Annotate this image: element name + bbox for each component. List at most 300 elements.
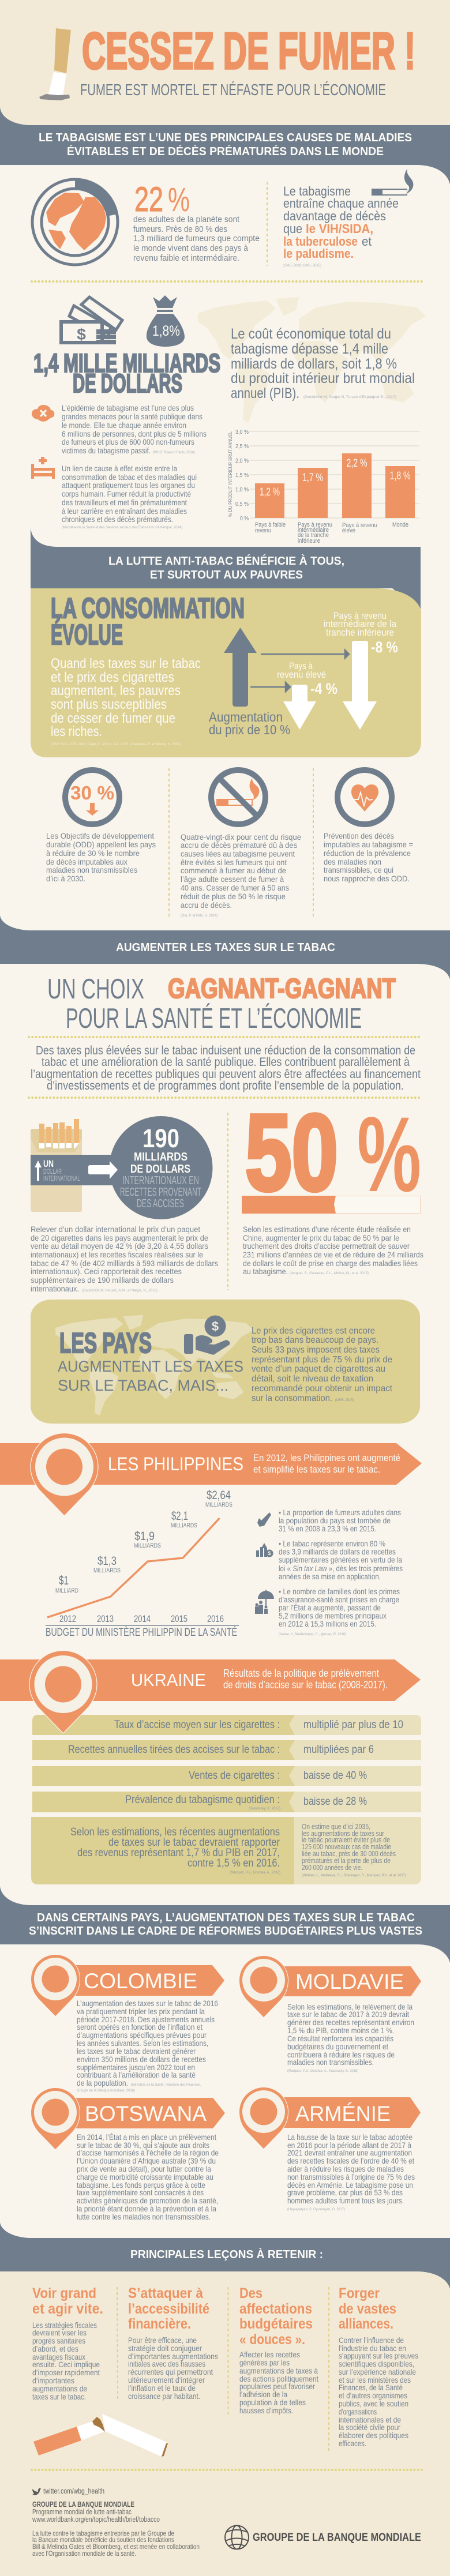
icon: globe with 22 percent ring	[32, 178, 118, 265]
heading: win-win	[47, 974, 396, 1034]
text: tobacco deaths: Le tabagisme	[283, 184, 351, 198]
country: Botswana: la priorité étant donnée à la prévention et à la	[77, 2204, 216, 2213]
panel: countries raise taxes	[31, 1300, 420, 1424]
bar chart: cost by income group: % DU PRODUIT INTÉRIEUR BRUT ANNUEL	[228, 431, 233, 517]
label: 190 billion: 190	[142, 1124, 179, 1153]
rows: indicators: multipliées par 6	[303, 1744, 374, 1756]
lesson: think big: Les stratégies fiscales	[32, 2320, 97, 2330]
bar chart: cost by income group	[228, 429, 419, 545]
lesson: think big: ensuite. Ceci implique	[32, 2360, 100, 2369]
text: tobacco revenue	[279, 1539, 403, 1581]
country: Colombie: d’augmentations spécifiques prévues pour	[77, 2030, 207, 2040]
text: China study: 231 millions d’années de vie et de réduire de 24 milliards	[243, 1250, 423, 1259]
text: economic cost	[231, 326, 415, 401]
icon: banknotes and coins: $	[77, 325, 86, 343]
country: Moldavie: taxe sur le tabac de 2017 à 2019 devrait	[287, 2010, 409, 2019]
stat: 50 percent	[242, 1092, 421, 1214]
text: tobacco revenue: supplémentaires générées en vertu de la	[279, 1555, 402, 1564]
bar chart: cost by income group: inférieure	[298, 538, 320, 545]
text: insurance: 5,2 millions de membres principaux	[279, 1611, 387, 1620]
arrow: white block	[88, 1161, 118, 1179]
text: tobacco deaths: le paludisme.	[283, 246, 354, 261]
bar chart: cost by income group: 0,5 %	[235, 501, 249, 508]
lesson: alliances: la société civile pour	[339, 2423, 400, 2432]
lesson: think big: et agir vite.	[32, 2301, 103, 2317]
text: smokers proportion	[279, 1508, 401, 1533]
lesson: soft earmarks: Des	[239, 2285, 262, 2301]
line chart: health ministry budget	[46, 1489, 239, 1639]
text: SDG target: d’ici à 2030.	[46, 874, 85, 883]
text: prices too low: vente d’un paquet de cigarettes au	[252, 1364, 385, 1374]
label: price increase: Augmentation	[209, 709, 283, 724]
country: Moldavie: Ce résultat renforcera les capacités	[287, 2034, 393, 2043]
text: quit early: 40 ans. Cesser de fumer à 50 ans	[181, 883, 289, 892]
country: Moldavie: budgétaires du gouvernement et	[287, 2042, 388, 2051]
country: Armenie: aider à réduire les risques de maladies	[287, 2164, 404, 2173]
country: Moldavie	[239, 1955, 421, 2073]
banner: Philippines: En 2012, les Philippines ont augmenté	[253, 1452, 400, 1463]
text: prices too low: Seuls 33 pays imposent des taxes	[252, 1345, 380, 1355]
line chart: health ministry budget: 2014	[134, 1613, 151, 1624]
bar chart: cost by income group: Pays à faible	[255, 521, 286, 528]
country: Moldavie: générer des recettes représentant environ	[287, 2018, 414, 2027]
stat: 22 percent: le monde vivent dans des pays à	[133, 244, 249, 253]
icon: hospital bed	[31, 457, 55, 479]
lesson: alliances	[339, 2285, 418, 2448]
lesson: affordability: récurrentes qui permettront	[128, 2367, 213, 2376]
lesson: soft earmarks: populaires peut favoriser	[239, 2382, 315, 2391]
footer contacts	[32, 2487, 200, 2558]
text: intro tax paragraph	[31, 1044, 421, 1092]
lesson: affordability: financière.	[128, 2316, 191, 2332]
text: prices too low	[252, 1326, 393, 1403]
text: one dollar explanation: internationaux.	[31, 1284, 79, 1293]
rows: indicators: baisse de 28 %	[303, 1796, 367, 1808]
bar chart: cost by income group: Pays à revenu	[298, 521, 332, 528]
text: epidemic: (WHO Tobacco Facts, 2016)	[153, 450, 195, 455]
country: Armenie	[239, 2087, 421, 2211]
lesson: affordability	[128, 2285, 218, 2401]
text: China study: Selon les estimations d’une récente étude réalisée en	[243, 1225, 411, 1234]
text: quit early: commencé à fumer au début de	[181, 866, 286, 875]
country: Armenie: hommes adultes fument tous les jours.	[287, 2196, 404, 2205]
lesson: affordability: d’importantes augmentations	[128, 2352, 218, 2361]
rows: indicators: (Krasovsky, K. 2017)	[249, 1807, 280, 1811]
text: prices too low: recommandé pour obtenir un impact	[252, 1384, 393, 1394]
text: poor quit more: les riches.	[51, 724, 102, 739]
rows: indicators	[68, 1719, 403, 1811]
heading: les pays: LES PAYS	[59, 1328, 152, 1359]
text: one dollar explanation: de 20 cigarettes dans les pays augmenterait le prix de	[31, 1233, 208, 1242]
text: health link: des travailleurs et met fin prématurément	[62, 498, 187, 507]
line chart: health ministry budget: MILLIARDS	[171, 1522, 197, 1529]
lesson: alliances: et sur les ministères des	[339, 2375, 411, 2385]
icon: up arrow	[35, 1161, 42, 1181]
icon: family under umbrella	[255, 1590, 274, 1614]
table: Ukraine results	[31, 1715, 421, 1884]
text: epidemic: L’épidémie de tabagisme est l’une des plus	[62, 403, 194, 412]
labels: arrows: intermédiaire de la	[324, 618, 396, 629]
text: tobacco revenue: • Le tabac représente environ 80 %	[279, 1539, 385, 1548]
text: prices too low: trop bas dans beaucoup de pays.	[252, 1335, 378, 1345]
band: section 5 heading	[0, 2222, 450, 2289]
banner: Ukraine: de droits d’accise sur le tabac (2008-2017).	[223, 1679, 388, 1691]
band: section 2 heading	[31, 528, 421, 611]
lesson: soft earmarks: l’adhésion de la	[239, 2390, 287, 2399]
text: poor quit more: augmentent, les pauvres	[51, 683, 181, 699]
text: health link: corps humain. Fumer réduit la productivité	[62, 489, 191, 498]
country: Botswana	[31, 2088, 225, 2227]
text: tobacco deaths	[283, 184, 399, 268]
lesson: soft earmarks: population à de telles	[239, 2398, 306, 2407]
text: SDG target: de décès imputables aux	[46, 857, 127, 866]
banner: Ukraine: Résultats de la politique de prélèvement	[223, 1668, 379, 1679]
text: SDG target: Les Objectifs de développement	[46, 831, 154, 840]
text: health link: (Ministère de la Santé et des Services sociaux des États-Unis d’Amérique, 2014)	[62, 524, 182, 530]
label: 190 billion: DES ACCISES	[137, 1197, 184, 1210]
stat: 22 percent: 22	[134, 180, 163, 219]
world map	[55, 1315, 254, 1415]
text: SDG target	[46, 831, 156, 883]
graphic: cigarette pack to 190 billion	[31, 1116, 212, 1219]
country: Botswana: l’Union douanière d’Afrique australe (39 % du	[77, 2156, 216, 2165]
icon: hand and coin	[184, 1315, 230, 1355]
text: prevention: imputables au tabagisme =	[324, 840, 413, 849]
lesson: alliances: Forger	[339, 2285, 380, 2301]
band: section 1 heading: ÉVITABLES ET DE DÉCÈS PRÉMATURÉS DANS LE MONDE	[67, 145, 384, 158]
text: economic cost: Le coût économique total du	[231, 326, 391, 342]
lesson: soft earmarks: hausses d’impôts.	[239, 2406, 293, 2415]
lesson: affordability: stratégie doit conjuguer	[128, 2344, 202, 2353]
icon: 30 percent circle: 30 %	[70, 782, 114, 803]
icon: money bag	[147, 295, 185, 347]
label: one international dollar: INTERNATIONAL	[43, 1174, 80, 1182]
icon: cigarette pack	[31, 1119, 82, 1212]
text: quit early: réduit de plus de 50 % le risque	[181, 892, 286, 901]
bar chart: cost by income group: 2,0 %	[235, 458, 249, 464]
label: one international dollar: UN	[43, 1158, 54, 1169]
country: Colombie: environ 350 millions de dollars de recettes	[77, 2055, 206, 2064]
text: quit early: l’âge adulte cessent de fumer à	[181, 874, 284, 884]
arrow: price up	[224, 628, 257, 707]
lesson: affordability: ultérieurement d’intégrer	[128, 2375, 205, 2385]
country: Moldavie: Selon les estimations, le relèvement de la	[287, 2002, 412, 2011]
label: price increase	[209, 709, 290, 737]
rows: indicators: Taux d’accise moyen sur les cigarettes :	[114, 1719, 280, 1731]
text: prices too low: Le prix des cigarettes est encore	[252, 1326, 375, 1336]
band: section 1 heading: LE TABAGISME EST L’UNE DES PRINCIPALES CAUSES DE MALADIES	[39, 132, 412, 144]
country: Botswana: d’accise harmonisés à l’échelle de la région de	[77, 2148, 219, 2157]
text: prices too low: sur la consommation.	[252, 1394, 332, 1403]
icon: map pin	[31, 1433, 98, 1516]
rows: indicators: multiplié par plus de 10	[303, 1719, 403, 1731]
country: Botswana: activités génériques de promotion de la santé,	[77, 2196, 218, 2205]
text: poor quit more: sont plus susceptibles	[51, 697, 167, 712]
country: Colombie: contribuant à l’amélioration de la santé	[77, 2070, 196, 2079]
lesson: think big	[32, 2285, 103, 2401]
country: Botswana: prix de vente au détail), pour lutter contre la	[77, 2164, 211, 2173]
lesson: soft earmarks	[239, 2285, 318, 2415]
lesson: think big: Voir grand	[32, 2285, 96, 2301]
icon: map pin	[239, 2087, 288, 2149]
bar chart: cost by income group: Pays à revenu	[342, 522, 377, 529]
text: quit early: accru de décès.	[181, 900, 232, 910]
line chart: health ministry budget: $1,3	[97, 1554, 117, 1568]
country: Botswana: En 2014, l’État a mis en place un prélèvement	[77, 2132, 216, 2142]
text: 2035 estimate	[302, 1822, 406, 1877]
line chart: health ministry budget: $1	[59, 1574, 69, 1587]
text: economic cost: du produit intérieur brut mondial	[231, 370, 415, 386]
country: Colombie	[31, 1954, 224, 2093]
heading: cost	[33, 348, 220, 398]
country: Armenie: non transmissibles à l’origine de 75 % des	[287, 2172, 415, 2181]
line chart: health ministry budget: BUDGET DU MINISTÈRE PHILIPPIN DE LA SANTÉ	[46, 1627, 237, 1639]
lesson: alliances: élaborer des politiques	[339, 2431, 408, 2440]
country: Armenie: des recettes fiscales de l’ordre de 40 % et	[287, 2156, 414, 2165]
banner: Philippines: LES PHILIPPINES	[108, 1454, 243, 1474]
text: tobacco deaths: la tuberculose	[283, 234, 358, 249]
lesson: alliances: de vastes	[339, 2301, 396, 2317]
icon: rising bars and dollar: $	[268, 1550, 271, 1556]
country: Colombie: (Ministère de la Santé, ministère des Finances,	[131, 2083, 201, 2087]
rows: indicators: baisse de 40 %	[303, 1770, 367, 1782]
text: economic cost: (Goodchild M, Nargis N, Tursan d’Espaignet E., 2017)	[303, 395, 396, 399]
rows: indicators: Prévalence du tabagisme quotidien :	[125, 1794, 280, 1806]
country: Botswana: taxe supplémentaire sont consacrés à des	[77, 2188, 204, 2197]
country: Colombie: de la population.	[77, 2078, 128, 2087]
heading: win-win: GAGNANT-GAGNANT	[168, 974, 396, 1004]
stat: 50 percent: 50	[245, 1092, 338, 1213]
lesson: alliances: et d’autres organismes	[339, 2391, 407, 2400]
bar chart: cost by income group: 1,0 %	[235, 487, 249, 493]
text: tobacco deaths: et	[362, 234, 372, 249]
labels: arrows: -4 %	[310, 680, 337, 697]
lesson: alliances: publics, avec le soutien	[339, 2399, 408, 2408]
lesson: alliances: alliances.	[339, 2316, 393, 2332]
text: prices too low: (OMS, 2015)	[335, 1398, 354, 1402]
text: poor quit more: de cesser de fumer que	[51, 711, 175, 726]
bar chart: cost by income group: 2,2 %	[346, 457, 367, 470]
text: health link: attaquent pratiquement tous les organes du	[62, 480, 195, 490]
lesson: think big: d’imposer rapidement	[32, 2368, 100, 2377]
text: health link	[62, 464, 197, 530]
bar chart: cost by income group: revenu	[255, 527, 271, 534]
text: quit early: (Jha, P. et Peto, R. 2014)	[181, 914, 217, 918]
footer contacts: twitter.com/wbg_health	[43, 2487, 104, 2495]
country: Moldavie: (Marquez, P.V., Dorotea, A., Krasovsky, K. 2016)	[287, 2069, 358, 2073]
text: one dollar explanation: tabac de 47 % (de 402 milliards à 593 milliards de dollars	[31, 1259, 218, 1268]
line chart: health ministry budget: MILLIARDS	[205, 1501, 232, 1508]
text: quit early: causes liées au tabagisme peuvent	[181, 849, 295, 858]
text: tobacco deaths: entraîne chaque année	[283, 196, 399, 211]
text: one dollar explanation: (Goodchild, M. Perucic, A.M., et Nargis, N., 2016)	[82, 1289, 158, 1293]
text: GDP estimate	[70, 1826, 280, 1875]
stat: 22 percent: revenu faible et intermédiaire.	[133, 254, 239, 263]
lesson: alliances: scientifiques disponibles,	[339, 2359, 414, 2368]
heading: les pays	[58, 1328, 243, 1394]
line chart: health ministry budget: $1,9	[134, 1530, 155, 1543]
country: Moldavie: 1,5 % du PIB, contre moins de 1 %.	[287, 2026, 394, 2035]
lesson: think big: d’abord, et des	[32, 2344, 78, 2353]
band: section 4 heading: DANS CERTAINS PAYS, L’AUGMENTATION DES TAXES SUR LE TABAC	[37, 1912, 415, 1924]
text: health link: Un lien de cause à effet existe entre la	[62, 464, 177, 473]
text: GDP estimate: contre 1,5 % en 2016.	[187, 1857, 280, 1869]
band: section 4 heading: S’INSCRIT DANS LE CADRE DE RÉFORMES BUDGÉTAIRES PLUS VASTES	[29, 1924, 422, 1937]
text: insurance: en 2012 à 15,3 millions en 2015.	[279, 1619, 376, 1628]
icon: map pin	[31, 2088, 80, 2150]
text: health link: chroniques et des décès prématurés.	[62, 515, 173, 524]
banner: Philippines	[0, 1433, 422, 1516]
text: GDP estimate: (Marquez, P.V., Dorotea, A., 2016)	[230, 1871, 280, 1875]
line chart: health ministry budget: $2,1	[171, 1509, 188, 1523]
text: prevention	[324, 831, 413, 883]
text: quit early	[181, 832, 301, 918]
bar chart: cost by income group: Monde	[392, 521, 408, 528]
text: one dollar explanation: Relever d’un dollar international le prix d’un paquet	[31, 1225, 200, 1234]
bar chart: cost by income group: 2,5 %	[235, 444, 249, 450]
heading: win-win: UN CHOIX	[47, 974, 144, 1005]
band: section 2 heading: LA LUTTE ANTI-TABAC BÉNÉFICIE À TOUS,	[108, 554, 344, 568]
text: tobacco revenue: années de sa mise en application.	[279, 1572, 381, 1581]
text: insurance: par l’État a augmenté, passant de	[279, 1603, 381, 1612]
text: poor quit more: et le prix des cigarettes	[51, 670, 174, 685]
text: China study	[243, 1225, 423, 1276]
text: insurance	[279, 1587, 400, 1636]
text: SDG target: à réduire de 30 % le nombre	[46, 848, 140, 858]
rows: indicators: Ventes de cigarettes :	[189, 1770, 280, 1782]
text: prevention: réduction de la prévalence	[324, 848, 411, 858]
text: insurance: (Kaiser, K, Bredenkamp, C., Iglesias, R. 2016)	[279, 1632, 346, 1636]
text: epidemic: victimes du tabagisme passif.	[62, 446, 151, 455]
text: insurance: d’assurance-santé sont prises en charge	[279, 1595, 399, 1604]
line chart: health ministry budget: 2015	[171, 1613, 187, 1624]
footer contacts: la Banque mondiale bénéficie du soutien des fondations	[32, 2536, 174, 2544]
country: Colombie: les taxes sur le tabac devraient générer	[77, 2046, 196, 2056]
icon: twitter bird	[32, 2488, 41, 2495]
icon: no smoking	[211, 770, 265, 824]
lesson: soft earmarks: augmentations de taxes à	[239, 2366, 318, 2375]
bar chart: cost by income group: 3,0 %	[235, 429, 249, 435]
country: Colombie: Groupe de la Banque mondiale, 2016)	[77, 2089, 135, 2093]
icon: 30 percent circle	[65, 770, 119, 824]
lesson: alliances: Contrer l’influence de	[339, 2335, 404, 2345]
panel: consumption evolves	[31, 588, 421, 757]
banner: Ukraine: UKRAINE	[131, 1670, 206, 1690]
country: Botswana: sur le tabac de 30 %, qui s’ajoute aux droits	[77, 2141, 209, 2150]
band: section 3 heading: AUGMENTER LES TAXES SUR LE TABAC	[116, 941, 335, 954]
stat: 22 percent	[133, 180, 260, 263]
text: poor quit more: Quand les taxes sur le tabac	[51, 656, 201, 671]
line chart: health ministry budget: MILLIARDS	[134, 1542, 161, 1549]
country: Colombie: supplémentaires jusqu’en 2022 tout en	[77, 2063, 195, 2072]
lesson: affordability: S’attaquer à	[128, 2285, 203, 2301]
arrow: minus 8 percent	[343, 641, 377, 730]
text: one dollar explanation	[31, 1225, 218, 1293]
lesson: alliances: efficaces.	[339, 2439, 366, 2448]
country: Colombie: L’augmentation des taxes sur le tabac de 2016	[77, 1999, 218, 2008]
line chart: health ministry budget: MILLIARD	[55, 1587, 78, 1594]
heading: les pays: AUGMENTENT LES TAXES	[58, 1358, 243, 1375]
text: China study: truchement des droits d’accise permettrait de sauver	[243, 1241, 410, 1251]
text: tobacco revenue: loi « Sin tax Law », dès les trois premières	[279, 1564, 403, 1573]
text: prevention: transmissibles, ce qui	[324, 865, 393, 874]
country: Moldavie: MOLDAVIE	[295, 1970, 404, 1993]
country: Colombie: les années suivantes. Selon les estimations,	[77, 2038, 208, 2048]
text: 2035 estimate: les augmentations de taxes sur	[302, 1829, 385, 1838]
text: tobacco deaths: que	[283, 221, 302, 236]
text: smokers proportion: la population du pays est tombée de	[279, 1516, 391, 1525]
icon: lit cigarette	[372, 168, 413, 196]
text: China study: au tabagisme.	[243, 1267, 288, 1276]
lesson: alliances: internationales et de	[339, 2415, 401, 2424]
arrow: to lower middle income	[261, 650, 349, 658]
text: China study: (Verguet, S., Gauvreau, C.L., Mishra, M., et al. 2015)	[290, 1271, 369, 1275]
band: section 2 heading: ET SURTOUT AUX PAUVRES	[150, 569, 303, 581]
text: intro tax paragraph: d’investissements et de programmes dont profite l’ensemble de la population.	[47, 1079, 404, 1092]
bar chart: cost by income group: 1,2 %	[260, 486, 280, 498]
arrow: minus 4 percent	[283, 685, 316, 730]
heading: les pays: SUR LE TABAC, MAIS...	[58, 1377, 228, 1394]
line chart: health ministry budget: 2012	[59, 1613, 76, 1624]
list: Philippines results	[255, 1508, 403, 1636]
lesson: think big: taxes sur le tabac.	[32, 2392, 86, 2401]
country: Colombie: COLOMBIE	[84, 1969, 197, 1993]
stat: 22 percent: 1,3 milliard de fumeurs que compte	[133, 234, 260, 243]
bar chart: cost by income group: de la tranche	[298, 532, 329, 539]
band: section 3 heading	[0, 915, 450, 979]
banner: Philippines: et simplifié les taxes sur le tabac.	[253, 1464, 380, 1475]
text: epidemic: grandes menaces pour la santé publique dans	[62, 412, 202, 421]
icon: map pin	[29, 1651, 97, 1733]
text: poor quit more: (CBO 2012, IARC 2011, Gallet, C. et List, J.A., 2003, Chaloupka, F. et Warner, K. 2000)	[51, 742, 181, 746]
line chart: health ministry budget: $2,64	[207, 1489, 231, 1502]
lesson: affordability: initiales avec des hausses	[128, 2359, 205, 2368]
text: China study: de dollars le coût de prise en charge des maladies liées	[243, 1259, 418, 1268]
lesson: soft earmarks: budgétaires	[239, 2316, 313, 2332]
icon: rising bars and dollar	[256, 1543, 273, 1557]
text: prices too low: représentant plus de 75 % du prix de	[252, 1355, 392, 1365]
country: Botswana: BOTSWANA	[85, 2102, 207, 2126]
label: one international dollar	[43, 1158, 80, 1182]
stat: 22 percent: fumeurs. Près de 80 % des	[133, 225, 227, 234]
country: Armenie: en 2016 pour la période allant de 2017 à	[287, 2141, 411, 2150]
footer contacts: www.worldbank.org/en/topic/health/brief/tobacco	[32, 2515, 160, 2524]
text: economic cost: annuel (PIB).	[231, 385, 299, 401]
label: price increase: du prix de 10 %	[209, 722, 290, 737]
text: one dollar explanation: vente au détail moyen de 42 % (de 3,20 à 4,55 dollars	[31, 1241, 208, 1251]
footer contacts: GROUPE DE LA BANQUE MONDIALE	[32, 2500, 134, 2509]
country: Armenie: (Hayrapetyan, S. Gyulumyan, O. 2017)	[287, 2207, 345, 2211]
line chart: health ministry budget: 2013	[97, 1613, 114, 1624]
icon: map pin	[31, 1954, 80, 2017]
label: 190 billion	[120, 1124, 201, 1210]
country: Armenie: grave problème, car plus de 53 % des	[287, 2188, 403, 2197]
label: 190 billion: DE DOLLARS	[130, 1163, 190, 1176]
lesson: affordability: Pour être efficace, une	[128, 2335, 197, 2345]
country: Moldavie: maladies non transmissibles.	[287, 2057, 374, 2067]
bar chart: cost by income group: 1,8 %	[390, 470, 411, 482]
country: Moldavie: contribuera à réduire les risques de	[287, 2050, 395, 2059]
icon: money bag: 1,8%	[152, 323, 180, 339]
band: section 4 heading	[0, 1886, 450, 1963]
lesson: think big: devraient viser les	[32, 2328, 87, 2337]
labels: arrows: revenu élevé	[277, 669, 326, 680]
lesson: think big: progrès sanitaires	[32, 2336, 85, 2345]
text: smokers proportion: • La proportion de fumeurs adultes dans	[279, 1508, 401, 1517]
text: epidemic: de fumeurs et plus de 600 000 non-fumeurs	[62, 437, 194, 446]
bar chart: cost by income group: 0 %	[240, 516, 249, 522]
stat: 22 percent: %	[168, 181, 190, 219]
